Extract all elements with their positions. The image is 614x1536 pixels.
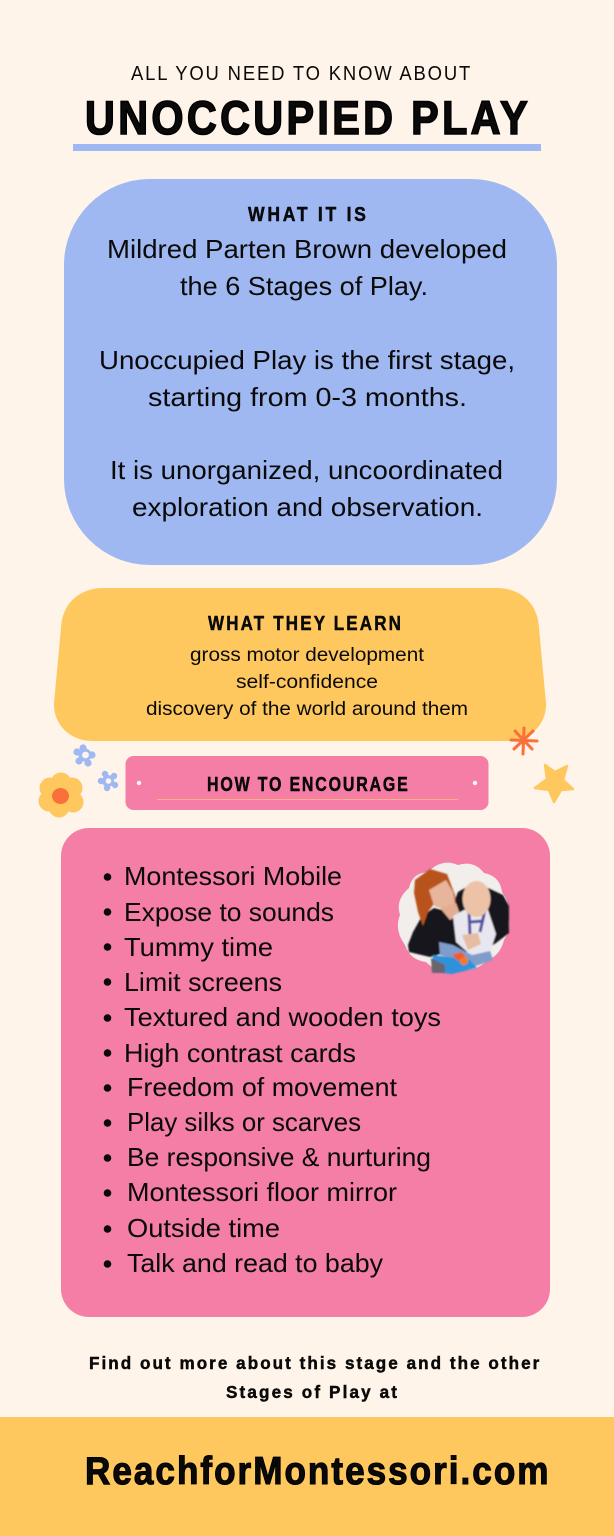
panel: what they learn — [54, 588, 546, 741]
bullet list: Tummy time — [124, 932, 273, 962]
text block: definition: starting from 0-3 months. — [148, 382, 467, 412]
text block: learning outcomes — [146, 644, 468, 720]
text block: definition: exploration and observation. — [132, 492, 483, 522]
text block: definition — [99, 234, 515, 522]
title kicker: ALL YOU NEED TO KNOW ABOUT — [131, 62, 470, 85]
bullet list: Be responsive & nurturing — [127, 1142, 431, 1172]
bullet list — [104, 861, 441, 1278]
heading: how to encourage: HOW TO ENCOURAGE — [207, 773, 408, 795]
bullet list: Montessori floor mirror — [127, 1177, 397, 1207]
title underline — [73, 144, 541, 151]
bullet list: Outside time — [127, 1213, 280, 1243]
bullet list: Freedom of movement — [127, 1072, 398, 1102]
panel: encouragement list — [61, 828, 550, 1317]
panel background — [64, 179, 557, 565]
text block: find out more: Stages of Play at — [226, 1382, 397, 1402]
bullet list: High contrast cards — [124, 1038, 356, 1068]
bullet list: Textured and wooden toys — [124, 1002, 441, 1032]
bullet list: Talk and read to baby — [127, 1248, 383, 1278]
icon: orange asterisk — [511, 728, 537, 754]
panel background — [61, 828, 550, 1317]
heading: what they learn: WHAT THEY LEARN — [208, 612, 401, 634]
panel background — [54, 588, 546, 741]
icon: yellow star — [535, 765, 573, 802]
text block: find out more — [89, 1353, 539, 1402]
text block: learning outcomes: gross motor development — [190, 644, 425, 666]
icon: blue flower top — [73, 744, 96, 767]
footer band — [0, 1417, 614, 1536]
text block: learning outcomes: discovery of the world around them — [146, 698, 468, 720]
text block: definition: the 6 Stages of Play. — [180, 271, 428, 301]
icon: blue flower lower — [98, 771, 118, 791]
banner dots — [137, 781, 477, 785]
bullet list: Play silks or scarves — [127, 1107, 361, 1137]
website address: ReachforMontessori.com — [85, 1448, 549, 1492]
banner underline — [157, 799, 458, 800]
bullet list: Montessori Mobile — [124, 861, 342, 891]
text block: learning outcomes: self-confidence — [236, 671, 378, 693]
text block: find out more: Find out more about this stage and the other — [89, 1353, 539, 1373]
icon: mother and baby photo — [398, 863, 509, 974]
heading: what it is: WHAT IT IS — [248, 203, 366, 225]
title block — [73, 62, 541, 151]
banner background — [126, 756, 488, 810]
text block: definition: Mildred Parten Brown developed — [107, 234, 507, 264]
icon: large yellow flower — [38, 772, 84, 818]
text block: definition: Unoccupied Play is the first stage, — [99, 345, 515, 375]
main title: UNOCCUPIED PLAY — [85, 93, 528, 145]
panel: how to encourage banner — [126, 756, 488, 810]
text block: definition: It is unorganized, uncoordinated — [110, 455, 503, 485]
bullet list: Expose to sounds — [124, 897, 334, 927]
bullet list: Limit screens — [124, 967, 282, 997]
panel: what it is — [64, 179, 557, 565]
